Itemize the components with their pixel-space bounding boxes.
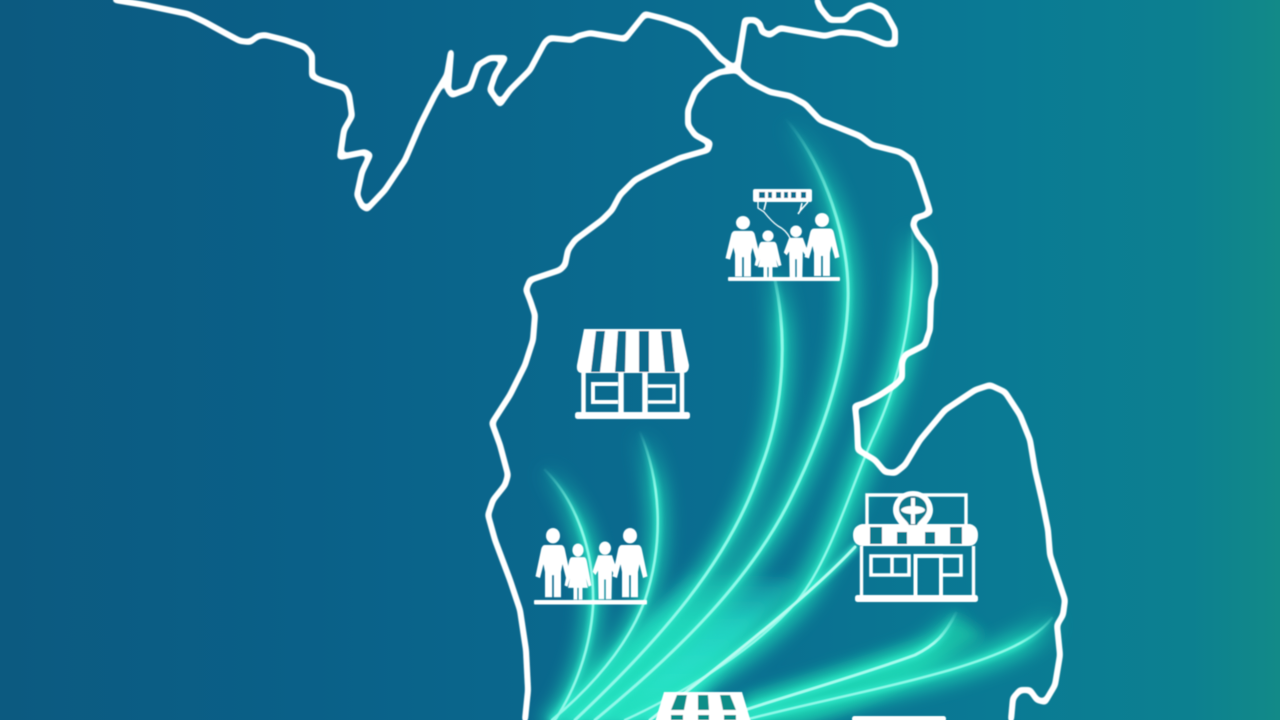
adult left [536,528,570,597]
shop walls and windows [584,373,682,413]
green glow towards the east coast [745,615,985,720]
awning stripes [671,695,736,720]
soft glow around the lines [545,118,1052,720]
icon: family, southwest [534,528,648,604]
Upper Peninsula south shore [115,0,737,209]
ground line [728,277,840,281]
ground line [534,600,647,604]
icon: storefront, west [575,329,690,419]
map pin badge [893,491,933,531]
walls, windows and door [862,546,974,595]
tighter halo around the lines [545,118,1052,720]
shop base [855,595,978,602]
awning [577,329,689,373]
awning [853,524,978,546]
awning stripes [591,331,675,372]
adult right [612,528,648,597]
child left [754,230,782,277]
child left [564,543,592,600]
glowing connection lines [545,118,1052,720]
icon: storefront, bottom centre [655,692,751,720]
upper sign frame [867,495,966,525]
Lower Peninsula west coast [488,70,737,720]
speech bubble [753,189,812,238]
awning panels [870,527,962,544]
icon: clinic storefront, east [853,491,978,602]
Upper Peninsula eastern end [737,0,895,70]
child right [784,225,808,277]
adult left [726,216,760,276]
child right [592,542,618,599]
icon: family with speech bubble [726,189,840,281]
sharp line cores [545,118,1052,720]
Michigan outline [115,0,1065,720]
shop base [575,412,690,419]
adult right [804,213,840,276]
bright fan glow at the bottom [548,575,800,720]
Lower Peninsula east coast [737,70,1065,720]
icon: building roof, bottom right [852,716,946,720]
